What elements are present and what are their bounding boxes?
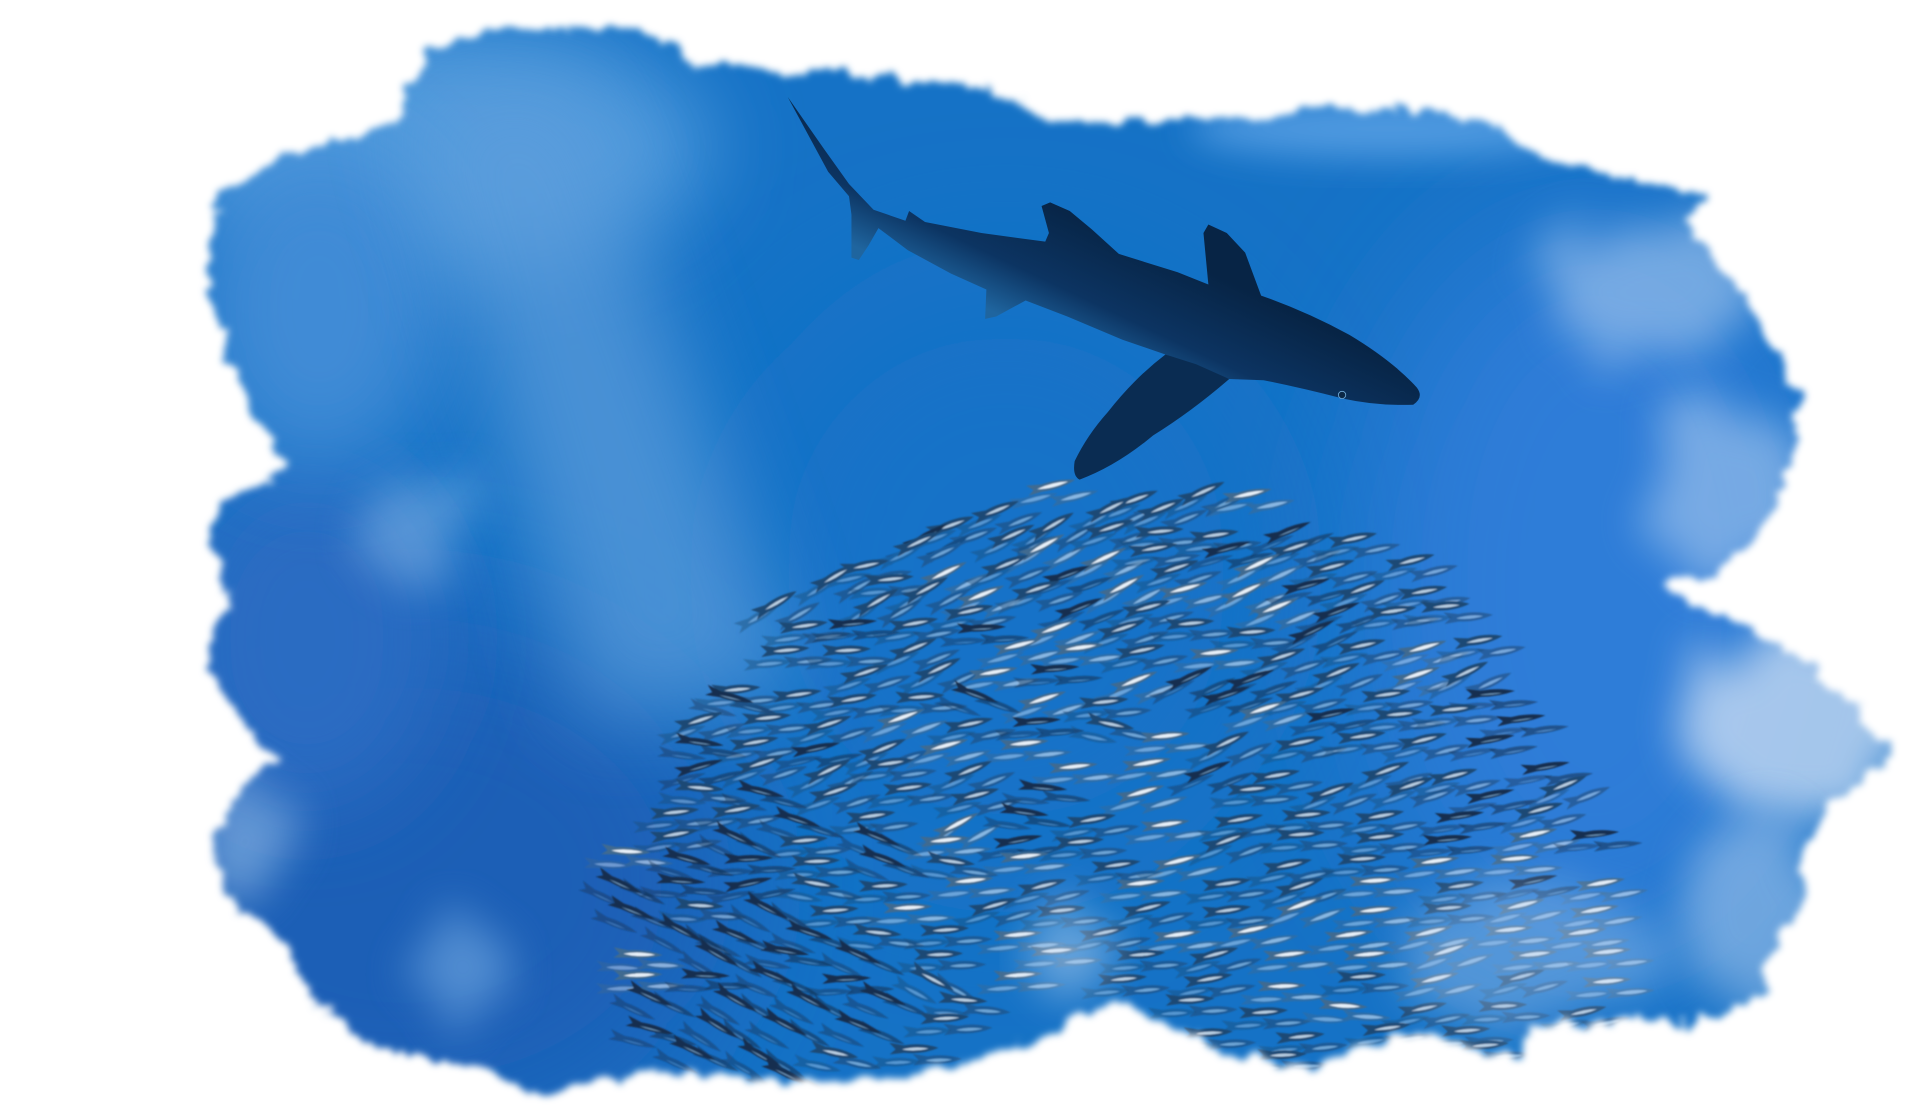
shark pectoral fin [1074,354,1229,480]
shark eye [1338,391,1346,399]
shark silhouette [788,97,1420,480]
fish school: shadow layers for density [578,474,1655,1101]
fish school [596,474,1632,1088]
